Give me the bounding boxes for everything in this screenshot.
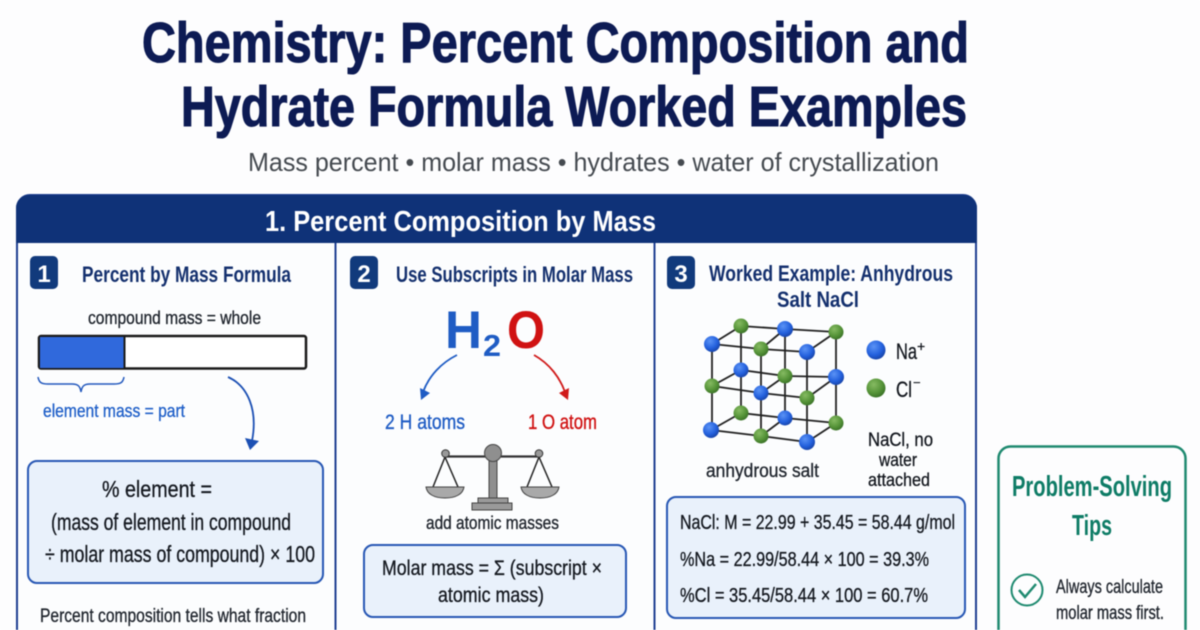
- formula box: molar mass: Molar mass = Σ (subscript ×: [382, 557, 602, 580]
- icon: check mark: [1012, 574, 1042, 606]
- section heading: 1. Percent Composition by Mass: [265, 206, 656, 238]
- panel: worked example NaCl: [667, 256, 965, 618]
- arrow: hydrogen count: [420, 355, 457, 400]
- legend: ions: Na: [896, 339, 918, 364]
- badge 3: 3: [674, 261, 688, 288]
- heading: percent by mass formula: Percent by Mass Formula: [82, 262, 292, 287]
- brace: [38, 377, 124, 392]
- label: add atomic masses: add atomic masses: [426, 513, 559, 533]
- label: no water attached: [868, 430, 933, 490]
- tips heading: [1012, 471, 1172, 542]
- legend: ions: +: [917, 338, 925, 354]
- formula box: % element =: [102, 476, 212, 502]
- formula: water: H: [445, 301, 482, 360]
- badge 2: 2: [357, 261, 371, 288]
- panel: percent composition section: [16, 195, 977, 630]
- calculation box: [667, 497, 965, 618]
- formula box: ÷ molar mass of compound) × 100: [45, 541, 315, 567]
- label: 1 O atom: 1 O atom: [528, 411, 597, 434]
- heading: use subscripts: Use Subscripts in Molar Mass: [396, 262, 633, 287]
- label: compound mass: compound mass = whole: [88, 308, 261, 328]
- label: no water attached: NaCl, no: [868, 430, 933, 451]
- badge 3: [667, 256, 695, 289]
- arrow to formula: [228, 377, 259, 450]
- heading: worked example: [709, 261, 953, 312]
- label: element mass: element mass = part: [43, 401, 185, 421]
- calculation box: NaCl: M = 22.99 + 35.45 = 58.44 g/mol: [680, 512, 955, 534]
- tip text: [1056, 577, 1164, 624]
- formula box: [28, 461, 323, 583]
- formula: water: [445, 301, 545, 363]
- legend: ions: [866, 338, 925, 402]
- badge 1: [30, 256, 58, 289]
- formula: water: O: [507, 301, 545, 360]
- formula box: molar mass: [364, 545, 626, 617]
- formula box: molar mass: atomic mass): [438, 584, 544, 607]
- panel: percent by mass formula: [28, 256, 323, 627]
- heading: worked example: Worked Example: Anhydrous: [709, 261, 953, 286]
- arrow: oxygen count: [534, 355, 569, 400]
- bar: part of whole: [39, 336, 306, 368]
- title: Chemistry: Percent Composition and: [142, 11, 969, 75]
- tip text: molar mass first.: [1056, 603, 1164, 624]
- calculation box: %Na = 22.99/58.44 × 100 = 39.3%: [680, 549, 929, 571]
- tips heading: Tips: [1072, 510, 1112, 542]
- title: [142, 11, 969, 139]
- section header bar: [16, 195, 977, 243]
- panel: problem-solving tips: [998, 446, 1186, 630]
- legend: ions: −: [913, 375, 921, 390]
- subtitle: Mass percent • molar mass • hydrates • water of crystallization: [248, 147, 939, 177]
- panel: use subscripts in molar mass: [350, 256, 633, 617]
- title: Hydrate Formula Worked Examples: [181, 75, 967, 139]
- label: no water attached: attached: [868, 470, 930, 490]
- formula box: (mass of element in compound: [51, 509, 291, 535]
- legend: ions: Cl: [896, 377, 912, 402]
- diagram: NaCl crystal lattice: [703, 318, 844, 450]
- calculation box: %Cl = 35.45/58.44 × 100 = 60.7%: [680, 585, 928, 607]
- tip text: Always calculate: [1056, 577, 1163, 598]
- formula: water: 2: [483, 328, 501, 363]
- label: no water attached: water: [878, 450, 917, 470]
- icon: balance scale: [426, 444, 559, 510]
- heading: worked example: Salt NaCl: [777, 287, 859, 312]
- label: anhydrous salt: anhydrous salt: [706, 461, 820, 482]
- label: 2 H atoms: 2 H atoms: [385, 411, 465, 434]
- explanation text: Percent composition tells what fraction: [40, 606, 306, 627]
- badge 2: [350, 256, 378, 289]
- badge 1: 1: [37, 261, 51, 288]
